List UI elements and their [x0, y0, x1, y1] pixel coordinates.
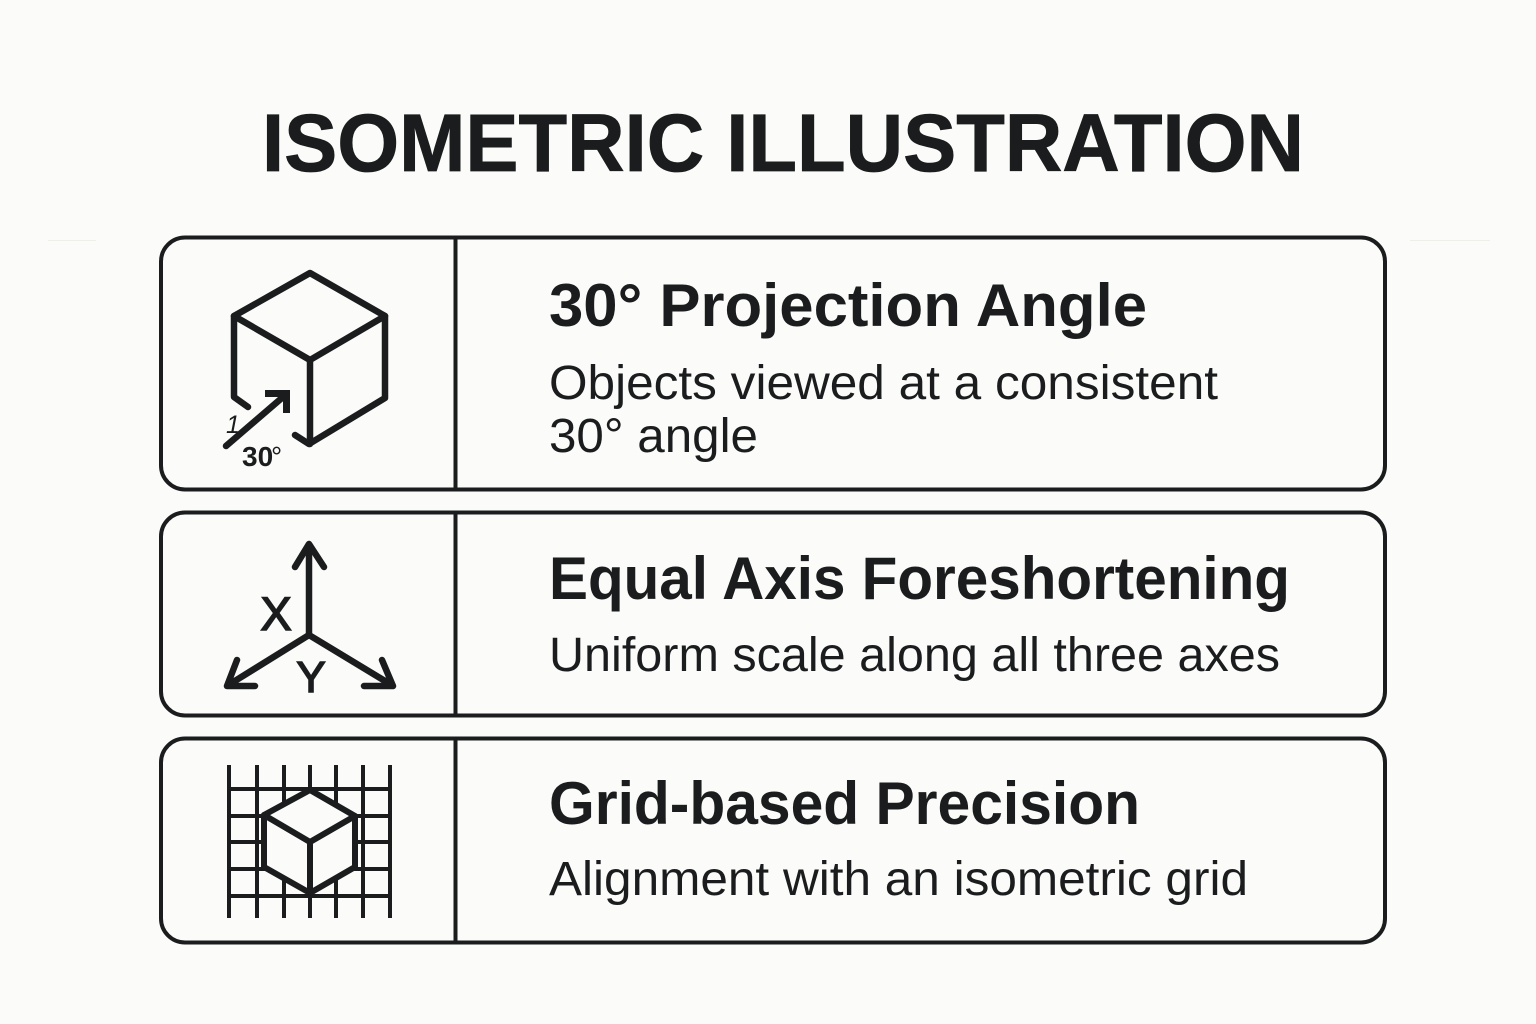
heading: 30° Projection Angle: 30° Projection Angle [549, 272, 1147, 339]
icon: isometric cube with 30° arrow: 30 [242, 441, 273, 472]
panel: grid-based precision [161, 738, 1385, 942]
icon: three axes: X [260, 587, 292, 640]
heading: grid-based precision: Grid-based Precision [549, 770, 1140, 837]
icon: isometric cube with 30° arrow [226, 273, 385, 472]
icon: cube on grid [229, 765, 390, 918]
panel: 30° projection angle [161, 238, 1385, 490]
heading: equal axis foreshortening: Equal Axis Foreshortening [549, 545, 1290, 612]
text: description: 30° angle [549, 410, 758, 463]
text: description [549, 357, 1218, 463]
icon: three axes: Y [296, 653, 326, 702]
title: ISOMETRIC ILLUSTRATION [262, 98, 1304, 189]
panel: equal axis foreshortening [161, 512, 1385, 716]
text: description: Uniform scale along all three axes [549, 629, 1280, 682]
icon: isometric cube with 30° arrow: ° [271, 441, 282, 472]
icon: isometric cube with 30° arrow: 1 [226, 411, 240, 439]
icon: three axes [227, 544, 393, 702]
text: description: Alignment with an isometric grid [549, 853, 1248, 906]
text: description: Objects viewed at a consistent [549, 357, 1218, 410]
